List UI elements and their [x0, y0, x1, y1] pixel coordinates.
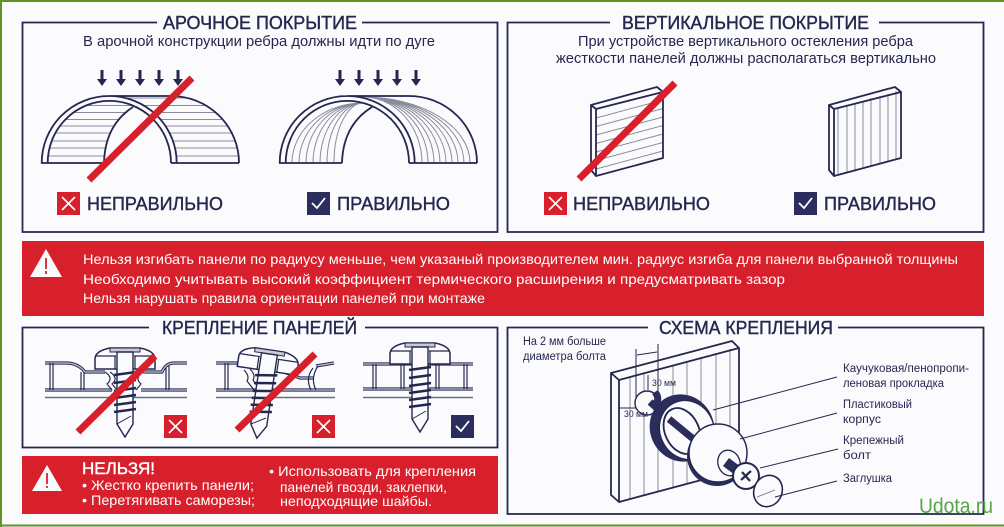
panel: arched roofing — [22, 12, 498, 232]
icon: check — [451, 415, 474, 438]
warning text: Необходимо учитывать высокий коэффициент термического расширения и предусматривать зазор — [83, 271, 785, 287]
label: right: ПРАВИЛЬНО — [824, 193, 936, 214]
wrong slash — [579, 83, 675, 179]
label: wrong: НЕПРАВИЛЬНО — [573, 193, 710, 214]
leader lines — [713, 377, 838, 497]
list: left: • Жестко крепить панели; — [82, 477, 254, 493]
diagram: exploded fastening — [611, 341, 838, 511]
gasket — [639, 384, 725, 472]
diagram: correct screw — [363, 343, 473, 432]
warning banner — [22, 241, 984, 316]
plug — [749, 471, 787, 511]
icon: load arrows, wrong — [97, 70, 183, 86]
labels: parts: Заглушка — [843, 473, 893, 485]
diagram: right panel with vertical ribs — [829, 87, 901, 176]
icon: warning triangle — [32, 465, 62, 491]
panel: fastening scheme — [508, 317, 984, 514]
diagram: wrong arch with horizontal ribs — [40, 96, 240, 163]
warning text: Нельзя нарушать правила ориентации панелей при монтаже — [83, 290, 485, 306]
warning text: Нельзя изгибать панели по радиусу меньше, чем указаный производителем мин. радиус изгиба для панели выбранной толщины — [83, 251, 958, 267]
icon: cross — [544, 192, 567, 215]
dome — [687, 426, 747, 486]
description: vertical roofing — [556, 34, 936, 67]
description: vertical roofing: При устройстве вертикального остекления ребра — [578, 34, 914, 50]
labels: parts: Крепежный — [843, 435, 904, 447]
heading: panel fastening: КРЕПЛЕНИЕ ПАНЕЛЕЙ — [162, 317, 357, 338]
panel: panel fastening — [22, 317, 498, 448]
list: left — [82, 477, 255, 508]
list: right — [269, 463, 476, 509]
icon: cross — [312, 415, 335, 438]
warning text — [83, 251, 958, 306]
description: vertical roofing: жесткости панелей должны располагаться вертикально — [556, 51, 936, 67]
labels: parts: Пластиковый — [843, 399, 912, 411]
heading: arched roofing: АРОЧНОЕ ПОКРЫТИЕ — [163, 12, 357, 33]
icon: check — [307, 192, 330, 215]
diagram: right arch with curved ribs — [279, 96, 477, 163]
heading: fastening scheme: СХЕМА КРЕПЛЕНИЯ — [659, 317, 833, 338]
list: left: • Перетягивать саморезы; — [82, 492, 255, 508]
note: hole size — [523, 336, 607, 363]
list: right: неподходящие шайбы. — [280, 493, 432, 509]
diagram: wrong panel with horizontal ribs — [591, 87, 663, 176]
label: 30 mm left: 30 мм — [624, 409, 648, 420]
wrong slash — [89, 78, 192, 180]
watermark: Udota.ru — [919, 495, 993, 518]
note: hole size: На 2 мм больше — [523, 336, 606, 348]
bolt head — [733, 463, 759, 489]
description: arched roofing: В арочной конструкции ребра должны идти по дуге — [83, 34, 435, 50]
diagram: tilted screw — [216, 346, 335, 442]
wrong slash — [78, 356, 155, 432]
label: 30 mm top: 30 мм — [652, 378, 676, 389]
icon: load arrows, right — [335, 70, 421, 86]
icon: cross — [57, 192, 80, 215]
diagram: overtightened screw — [45, 348, 187, 437]
heading: do not: НЕЛЬЗЯ! — [82, 459, 155, 478]
icon: check — [794, 192, 817, 215]
icon: warning triangle — [30, 249, 62, 277]
panel: vertical roofing — [508, 12, 984, 232]
labels: parts — [843, 363, 969, 485]
wrong slash — [237, 354, 315, 430]
heading: vertical roofing: ВЕРТИКАЛЬНОЕ ПОКРЫТИЕ — [622, 12, 869, 33]
label: right: ПРАВИЛЬНО — [337, 193, 450, 214]
list: right: • Использовать для крепления — [269, 463, 476, 479]
label: wrong: НЕПРАВИЛЬНО — [87, 193, 223, 214]
note: hole size: диаметра болта — [523, 351, 607, 363]
warning: do not — [22, 456, 498, 514]
list: right: панелей гвозди, заклепки, — [280, 479, 447, 495]
labels: parts: корпус — [843, 414, 881, 426]
icon: cross — [164, 415, 187, 438]
labels: parts: болт — [843, 450, 872, 462]
labels: parts: леновая прокладка — [843, 378, 945, 390]
labels: parts: Каучуковая/пенопропи- — [843, 363, 969, 375]
